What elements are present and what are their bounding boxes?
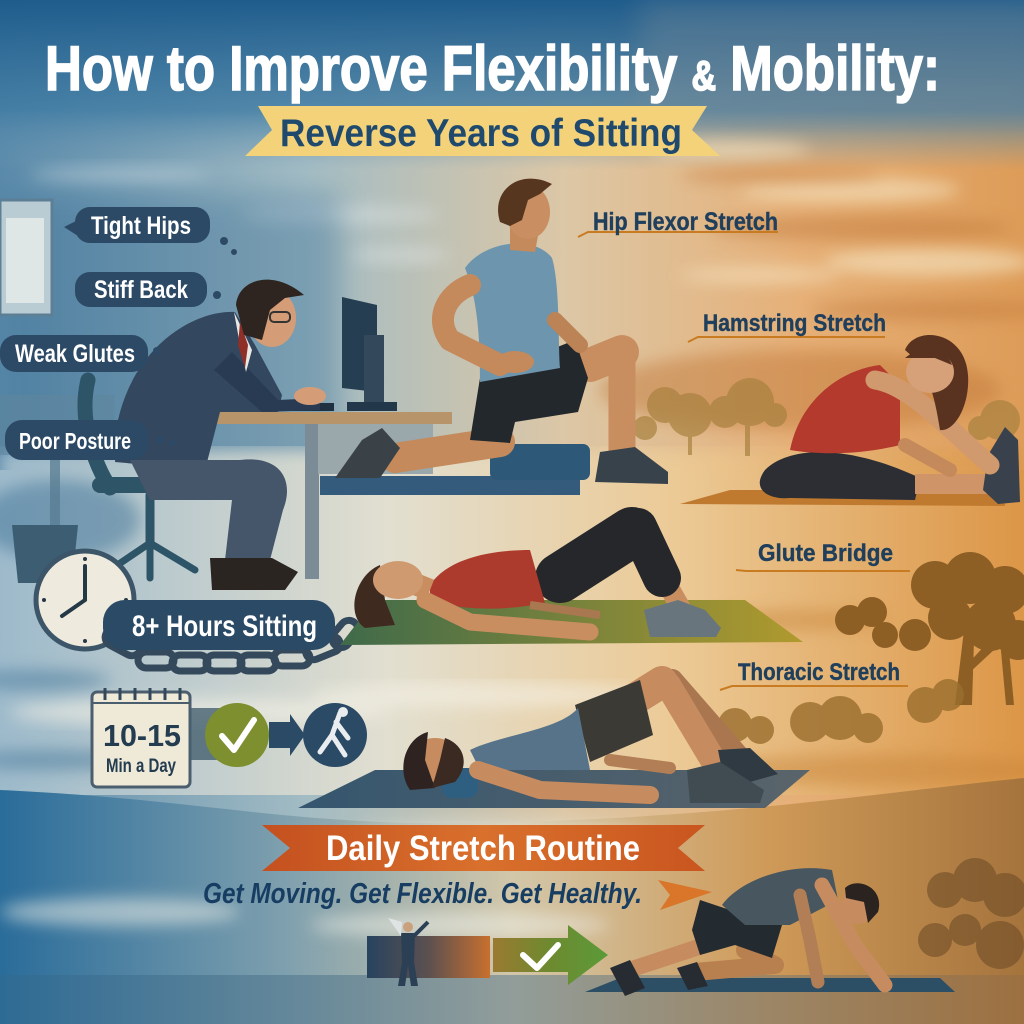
icon: clock <box>36 551 134 649</box>
tagline: Get Moving. Get Flexible. Get Healthy. <box>203 878 642 910</box>
bubble: tight hips <box>64 207 237 255</box>
figure: glute bridge woman <box>340 527 803 645</box>
desk and monitor <box>216 297 452 579</box>
background trees <box>633 378 1024 969</box>
bubble: weak glutes: Weak Glutes <box>15 340 135 368</box>
sitting man <box>115 280 326 590</box>
bubble: poor posture <box>5 420 175 460</box>
banner: daily stretch routine: Daily Stretch Routine <box>326 829 640 868</box>
bubble: stiff back <box>75 272 221 307</box>
bubble: poor posture: Poor Posture <box>19 428 131 454</box>
title: How to Improve Flexibility & Mobility: <box>45 34 940 104</box>
label: hamstring stretch: Hamstring Stretch <box>703 310 886 337</box>
figure: hip flexor stretch man <box>320 179 668 495</box>
bubble: weak glutes <box>0 335 161 372</box>
bubble: tight hips: Tight Hips <box>91 212 191 240</box>
label: hip flexor stretch: Hip Flexor Stretch <box>593 208 778 236</box>
icon: transition bar with standing figure <box>367 918 490 986</box>
figure: thoracic stretch man <box>298 680 810 808</box>
office chair <box>85 380 210 578</box>
icon: check and arrow progress <box>190 703 367 767</box>
icon: calendar: Min a Day <box>106 756 176 777</box>
banner: daily stretch routine <box>262 825 705 871</box>
office background <box>0 200 115 583</box>
icon: green check arrow <box>493 925 608 985</box>
icon: calendar: 10-15 <box>103 718 181 753</box>
subtitle ribbon: Reverse Years of Sitting <box>280 112 682 155</box>
label: 8+ hours sitting: 8+ Hours Sitting <box>132 610 317 643</box>
label: glute bridge: Glute Bridge <box>758 540 893 567</box>
bubble: stiff back: Stiff Back <box>94 276 188 304</box>
icon: calendar <box>92 688 190 787</box>
figure: hamstring stretch woman <box>680 335 1020 506</box>
label: thoracic stretch: Thoracic Stretch <box>738 659 900 686</box>
icon: orange arrow <box>658 880 712 910</box>
figure: crawling lunge man <box>585 868 955 996</box>
label: 8+ hours sitting <box>103 600 335 650</box>
chain <box>102 617 362 671</box>
